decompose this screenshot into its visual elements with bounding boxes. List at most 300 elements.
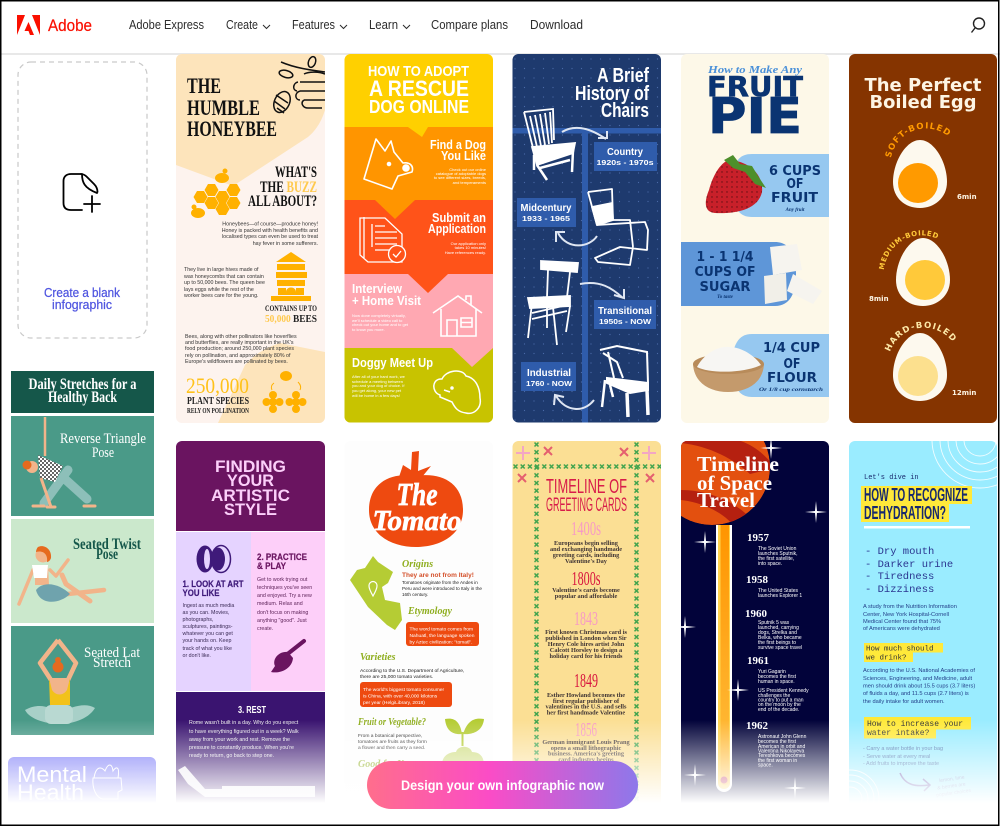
stat: 250,000 plant species: PLANT SPECIES [187, 396, 249, 407]
chair: country [524, 109, 575, 180]
entry: 1957: The Soviet Union [758, 546, 797, 552]
icon: search [972, 18, 984, 32]
panel: rescue dog [344, 54, 493, 423]
stat: 250,000 plant species: 250,000 [186, 373, 249, 398]
step: interview and home visit: to know you more. [352, 327, 385, 332]
label: industrial: Industrial [527, 368, 571, 379]
artistic style title [211, 457, 290, 519]
timeline entry: 1800s: popular and affordable [555, 593, 617, 600]
artistic style title: FINDING [215, 457, 286, 476]
section: varieties: is China, with over 40,000 kilotons [363, 694, 438, 700]
tomato illustration with title: Tomato [372, 505, 462, 537]
step: submit application: Have references ready. [445, 250, 486, 255]
panel: fruit pie [681, 54, 829, 423]
timeline entry: 1849: Esther Howland becomes the [547, 692, 625, 699]
label: cups of sugar [694, 250, 756, 300]
entry: 1962: space. [758, 762, 773, 768]
greeting cards title: TIMELINE OF [546, 476, 627, 498]
blank card label: infographic [52, 298, 112, 312]
call to action button: Design your own infographic now [401, 777, 604, 793]
heading: how to increase: water intake? [867, 729, 930, 738]
timeline entry: 1843: Henry Cole hires artist John [548, 641, 625, 648]
step 2: practice and play: and enjoyed. Try a new [257, 593, 312, 599]
icon: strawberry [706, 155, 766, 213]
step: find a dog: Find a Dog [430, 137, 486, 152]
stretches title: Healthy Back [48, 389, 117, 406]
recommendation text: of fluids a day, and 11.5 cups (2.7 liters) is [863, 691, 969, 697]
icon: new document [64, 174, 100, 212]
icon: hive and bee [271, 56, 325, 115]
section: good for you: Good for You [358, 759, 413, 770]
Adobe wordmark: Adobe [48, 16, 92, 35]
step: interview and home visit: Now done completely virtually, [352, 313, 406, 318]
band: fruit [731, 154, 829, 217]
panel: tomato [344, 441, 493, 826]
step: find a dog [430, 137, 487, 185]
mental health title: Health [17, 780, 84, 805]
step 3: rest: ready to return, go back to step one. [189, 753, 274, 759]
step 1: look at art: your hands on. Keep [182, 638, 231, 644]
symptoms list [865, 546, 953, 596]
section: varieties [360, 652, 464, 707]
step 3: rest: away from your work and rest. Remove the [189, 737, 290, 743]
entry: 1962: the first woman in [758, 758, 797, 764]
timeline entry: 1856: 1856 [575, 719, 597, 741]
timeline entry: 1849: 1849 [574, 670, 598, 692]
pose label: reverse triangle: Reverse Triangle [60, 431, 146, 447]
stat: 50,000 bees: CONTAINS UP TO [265, 303, 317, 313]
timeline entry: 1843: published in London when Sir [545, 635, 627, 642]
study text: of Americans were dehydrated [863, 626, 940, 632]
panel: dehydration [821, 392, 1000, 826]
step 1: look at art: YOU LIKE [182, 588, 220, 599]
timeline entry: 1800s: Valentine's cards become [552, 587, 620, 594]
section: origins: 16th century. [402, 592, 428, 597]
entry: 1958: 1958 [746, 574, 768, 586]
entry: 1960: launched, carrying [758, 625, 799, 631]
rescue dog title [368, 66, 469, 113]
nav link: Features: Features [292, 17, 335, 32]
note: lemon, lime and berries: & berries are [937, 782, 966, 791]
intro text: Let's dive in [864, 474, 919, 482]
entry: 1957: launches Sputnik, [758, 551, 797, 557]
timeline entry: 1849: valentines in the U.S. and sells [546, 704, 627, 710]
rescue dog title: DOG ONLINE [369, 97, 469, 117]
timeline entry: 1400s: and exchanging handmade [550, 546, 622, 553]
label: midcentury: Midcentury [520, 203, 572, 214]
label: flour [759, 341, 823, 393]
blank infographic card [18, 62, 147, 338]
timeline entry: 1400s [550, 518, 622, 565]
label: flour: 1/4 CUP [763, 341, 820, 356]
label: flour: OF [784, 357, 800, 372]
section: origins [402, 559, 482, 597]
entry: 1962: Tereshkova becomes [758, 753, 806, 759]
body text 1: Honeybees—of course—produce honey! [222, 222, 318, 228]
label: transitional: 1950s - NOW [599, 319, 651, 326]
body text 1 [222, 222, 319, 247]
section: fruit or vegetable: From a botanical perspective, [358, 733, 422, 739]
entry: 1961: on the moon by the [758, 702, 801, 708]
mental health title [17, 762, 87, 805]
space travel title: Travel [697, 488, 755, 512]
buzz heading: WHAT'S [275, 164, 317, 181]
section: varieties: Varieties [360, 652, 396, 663]
timeline entry: 1800s: 1800s [572, 568, 601, 590]
tips list [863, 746, 943, 767]
entry: 1960 [745, 608, 802, 651]
entry: 1962: Astronaut John Glenn [758, 734, 807, 740]
timeline entry: 1856: German immigrant Louis Prang [542, 739, 630, 746]
panel: artistic style [176, 441, 325, 826]
buzz heading: THE BUZZ [260, 179, 317, 196]
step 2: practice and play: Get to work trying out [257, 577, 308, 583]
egg: soft-boiled: 6min [957, 193, 977, 201]
mental health title: Mental [17, 762, 87, 787]
label: 6 cups of fruit: FRUIT [771, 191, 818, 206]
step 2: practice and play: techniques you've seen [257, 585, 312, 591]
step 2: practice and play: create. [257, 626, 273, 632]
icon: seedling [442, 719, 484, 765]
note: lemon, lime and berries: popular choices [936, 788, 972, 799]
timeline entry: 1856: opens a small lithographic [551, 745, 621, 752]
entry: 1958 [746, 574, 802, 599]
entry: 1961: end of the decade. [758, 707, 799, 713]
label: country [594, 142, 657, 171]
step 1: look at art [182, 579, 244, 659]
step 1: look at art: sculptures, paintings- [182, 624, 233, 630]
timeline entry: 1400s: Europeans begin selling [554, 540, 619, 547]
chairs title [576, 67, 650, 117]
blank card label [44, 286, 121, 312]
entry: 1961: challenges the [758, 693, 790, 699]
label: transitional [594, 300, 656, 329]
pose label: seated lat [84, 645, 141, 671]
map: Peru [350, 556, 402, 630]
entry: 1962 [746, 720, 807, 768]
timeline entry: 1849 [546, 670, 627, 716]
recommendation text: According to the U.S. National Academies of [863, 668, 975, 674]
label: midcentury [517, 198, 576, 227]
honeybee title: THE [187, 73, 221, 98]
step: submit application: takes 10 minutes! [455, 245, 486, 250]
step 3: rest: to have everything figured out in a week? Walk [189, 729, 299, 735]
chairs title: History of [575, 83, 649, 105]
pose label: seated lat: Stretch [93, 655, 131, 671]
step 2: practice and play: & PLAY [257, 561, 287, 572]
step: doggy meet up: After all of your hard work, we [352, 374, 406, 379]
figure: seated lat [25, 640, 95, 724]
step 3: rest: 3. REST [238, 705, 266, 716]
entry: 1961: 1961 [747, 655, 769, 667]
entry: 1957: 1957 [747, 532, 770, 544]
icon: flowers [262, 371, 306, 413]
section: origins: Origins [402, 559, 433, 570]
body text 3: and butterflies, are really important in the UK's [185, 340, 294, 346]
note: lemon, lime and berries: lemon, lime [939, 775, 965, 784]
boiled egg title [864, 76, 982, 113]
egg: hard-boiled: 12min [952, 389, 976, 397]
step: submit application: Our application only [451, 241, 486, 246]
entry: 1962: becomes the first [758, 739, 797, 745]
dehydration title [861, 485, 972, 523]
step: interview and home visit: + Home Visit [352, 293, 422, 308]
nav link: Adobe Express: Adobe Express [129, 17, 204, 32]
body text 1: hay fever in some sufferers. [253, 241, 318, 247]
timeline entry: 1856: business. America's greeting [548, 750, 625, 758]
fruit pie title: FRUIT [707, 70, 803, 103]
entry: 1962: 1962 [746, 720, 768, 732]
arrow: to midcentury [556, 232, 597, 245]
heading: how much: we drink? [866, 654, 907, 662]
arrow: to industrial [554, 395, 594, 409]
icon: skep hive [271, 252, 311, 301]
rescue dog title: HOW TO ADOPT [368, 63, 469, 80]
step 1: look at art: Ingest as much media [182, 603, 234, 609]
navigation bar [0, 0, 1000, 55]
buzz heading [248, 166, 316, 206]
section: etymology: Nahuatl, the language spoken [410, 633, 475, 639]
timeline entry: 1400s: greeting cards, including [553, 552, 620, 559]
label: cups of sugar: To taste [717, 295, 734, 300]
entry: 1961: US President Kennedy [758, 688, 809, 694]
panel: space travel [654, 409, 829, 826]
step: submit application: Application [428, 221, 486, 236]
tomato illustration with title [369, 451, 463, 547]
icon: eyes [196, 546, 230, 572]
label: midcentury: 1933 - 1965 [522, 216, 570, 223]
recommendation text: men should drink about 15.5 cups (3.7 liters) [863, 684, 975, 690]
nav link: Download: Download [530, 17, 583, 32]
entry: 1962: Valentina Nikolayeva [758, 748, 805, 754]
section: etymology: by Aztec civilization: "tomatl". [410, 640, 472, 646]
step: doggy meet up: will be home in a few days! [352, 393, 400, 398]
entry: 1961: becomes the first [758, 674, 797, 680]
timeline entry: 1849: first regular publisher of [553, 698, 620, 705]
panel: daily stretches [11, 371, 154, 735]
body text 2: up to 50,000 bees. The queen bee [184, 280, 265, 286]
entry: 1960: Belka, who became [758, 635, 802, 641]
study text [863, 604, 957, 632]
heading: how much [864, 643, 943, 662]
entry: 1960: 1960 [745, 608, 768, 620]
pose label: seated lat: Seated Lat [84, 645, 141, 661]
entry: 1960: dogs, Strelka and [758, 630, 797, 636]
stretches title [28, 376, 137, 406]
step 1: look at art: whatever you can get [182, 631, 233, 637]
bottom fade [0, 720, 1000, 803]
label: industrial [521, 362, 576, 391]
space travel title: Timeline [697, 452, 779, 476]
egg: medium-boiled: 8min [869, 295, 889, 303]
label: industrial: 1760 - NOW [526, 381, 572, 388]
recommendation text: Sciences, Engineering, and Medicine, adult [863, 676, 972, 682]
pose label: reverse triangle [60, 431, 146, 461]
panel: history of chairs [512, 54, 661, 423]
artistic style title: ARTISTIC [211, 486, 290, 505]
honeybee title [187, 78, 276, 136]
step: doggy meet up: you and your dog of choice. If [352, 383, 405, 388]
stat: 250,000 plant species [186, 378, 249, 413]
step: doggy meet up: schedule a meeting between [352, 379, 403, 384]
label: cups of sugar: SUGAR [700, 280, 750, 295]
label: flour: Or 1/8 cup cornstarch [759, 388, 823, 393]
tips list: - Add fruits to improve the taste [863, 761, 939, 767]
greeting cards title [546, 476, 627, 516]
nav link: Compare plans: Compare plans [431, 17, 508, 32]
chair: transitional [528, 261, 578, 345]
step 1: look at art: or don't like. [182, 653, 211, 659]
arrow: chair to country [562, 128, 607, 139]
timeline entry: 1843: Calcott Horsley to design a [550, 647, 623, 654]
egg: soft-boiled: SOFT-BOILED [885, 122, 950, 158]
egg: soft-boiled [885, 122, 976, 208]
symptoms list: - Dry mouth [865, 546, 934, 558]
tips list: - Serve water at every meal [863, 754, 930, 760]
step 1: look at art: track of what you like [182, 646, 232, 652]
section: origins: Peru and were introduced to Italy in the [402, 586, 482, 591]
icon: head with lotus [93, 765, 122, 799]
body text 3 [185, 334, 297, 365]
buzz heading: ALL ABOUT? [248, 193, 317, 210]
blank card label: Create a blank [44, 286, 121, 300]
step 2: practice and play: medium. Relax and [257, 601, 303, 607]
panel: greeting cards [512, 441, 661, 826]
arrow: tips [900, 773, 930, 791]
body text 2: They live in large hives made of [184, 267, 259, 273]
pose label: seated twist: Pose [96, 546, 118, 563]
step: interview and home visit: check out your home and to get [352, 322, 409, 327]
step: interview and home visit: we'll schedule a video call to [352, 318, 403, 323]
timeline entry: 1843: holiday card for his friends [549, 653, 623, 660]
entry: 1961: country to put a man [758, 698, 804, 704]
icon: paintbrush [271, 641, 304, 672]
panel: greeting cards: GREETING CARDS [546, 495, 627, 516]
step: find a dog: to see different sizes, breeds, [434, 175, 486, 180]
timeline entry: 1843 [545, 608, 627, 660]
entry: 1958: The United States [758, 588, 799, 594]
step: interview and home visit: Interview [352, 281, 403, 296]
nav link: Create: Create [226, 17, 258, 32]
panel: boiled egg [849, 54, 997, 423]
step: doggy meet up: you get along, your new pet [352, 388, 402, 393]
step: submit application [428, 210, 486, 255]
figure: seated twist [19, 546, 104, 604]
egg: medium-boiled [869, 230, 950, 306]
study text: Center, New York Hospital-Cornell [863, 612, 949, 618]
step 2: practice and play: anything "good". Just [257, 618, 307, 624]
recommendation text: the daily intake for adult women. [863, 699, 945, 705]
timeline entry: 1849: her first handmade Valentine [547, 710, 625, 716]
entry: 1960: Sputnik 5 was [758, 620, 790, 626]
symptoms list: - Dizziness [865, 584, 934, 596]
artistic style title: YOUR [227, 471, 274, 490]
section: varieties: there are 25,000 tomato varieties. [360, 674, 433, 680]
icon: sugar cubes [764, 244, 822, 304]
chairs title: A Brief [597, 65, 649, 87]
timeline entry: 1800s [552, 568, 620, 600]
chairs title: Chairs [601, 100, 649, 122]
body text 2: worker bees care for the young. [184, 293, 258, 299]
step 1: look at art: photographs, [182, 617, 213, 623]
decorative cross marks [516, 446, 656, 482]
recommendation text [863, 668, 975, 705]
section: varieties: per year (HelgiLibrary, 2018) [363, 700, 425, 706]
step 2: practice and play [257, 552, 312, 632]
timeline entry: 1856: card industry begins [558, 756, 614, 764]
entry: 1960: the first beings to [758, 640, 796, 646]
timeline entry: 1400s: Valentine's Day [565, 558, 608, 565]
heading: how to increase [864, 717, 971, 738]
symptoms list: - Tiredness [865, 571, 934, 583]
figure: reverse triangle [22, 417, 95, 507]
step 3: rest: pressure to constantly produce. When you're [189, 745, 294, 751]
rocket trail [716, 525, 732, 792]
icon: planet [654, 409, 775, 528]
section: etymology: Etymology [407, 606, 452, 617]
fruit pie title: PIE [708, 88, 802, 145]
step 3: rest [189, 705, 299, 759]
icon: dog [364, 139, 413, 189]
egg: medium-boiled: MEDIUM-BOILED [878, 230, 938, 270]
section: fruit or vegetable: Fruit or Vegetable? [357, 717, 426, 728]
label: country: Country [607, 147, 643, 158]
panel: honeybee [176, 54, 325, 423]
pose label: seated twist: Seated Twist [73, 536, 142, 553]
step 1: look at art: 1. LOOK AT ART [182, 579, 244, 590]
step: find a dog: and temperaments [453, 180, 486, 185]
timeline entry: 1400s: 1400s [571, 518, 601, 540]
boiled egg title: Boiled Egg [870, 93, 976, 113]
decorative rings [821, 392, 1000, 826]
step 2: practice and play: 2. PRACTICE [257, 552, 307, 563]
icon: Adobe logo [17, 15, 40, 35]
icon: house [433, 296, 482, 336]
timeline entry: 1843: 1843 [574, 608, 598, 630]
icon: honeycomb [191, 168, 240, 218]
step 3: rest: Rome wasn't built in a day. Why do you expect [189, 720, 299, 726]
study text: A study from the Nutrition Information [863, 604, 957, 610]
step: find a dog: catalogue of adoptable dogs [436, 171, 486, 176]
honeybee title: HONEYBEE [187, 116, 277, 141]
entry: 1957: the first satellite, [758, 556, 794, 562]
icon: poodle [434, 371, 480, 413]
band: flour [731, 334, 829, 397]
chair: industrial [600, 346, 648, 417]
icon: flour bowl [693, 347, 764, 392]
body text 2: wax honeycombs that can contain [184, 274, 264, 280]
symptoms list: - Darker urine [865, 559, 953, 571]
section: etymology: The word tomato comes from [410, 626, 473, 632]
stat: 250,000 plant species: RELY ON POLLINATION [187, 406, 249, 415]
fruit pie title [708, 66, 804, 134]
panel: mental health [8, 757, 156, 826]
body text 3: rely on pollination, and approximately 80% of [185, 353, 291, 359]
tips list: - Carry a water bottle in your bag [863, 746, 943, 752]
entry: 1958: launches Explorer 1 [758, 593, 802, 599]
icon: application form [360, 217, 406, 262]
label: transitional: Transitional [598, 306, 652, 317]
timeline entry: 1843: First known Christmas card is [545, 629, 627, 636]
body text 2: lays eggs while the rest of the [184, 287, 254, 293]
space travel title [697, 452, 779, 512]
stretches title: Daily Stretches for a [28, 376, 137, 393]
step: doggy meet up [352, 355, 433, 398]
stars [674, 437, 827, 799]
fruit pie title: How to Make Any [707, 65, 802, 76]
icon: sun lounger [178, 766, 315, 797]
entry: 1957: into space. [758, 561, 782, 567]
